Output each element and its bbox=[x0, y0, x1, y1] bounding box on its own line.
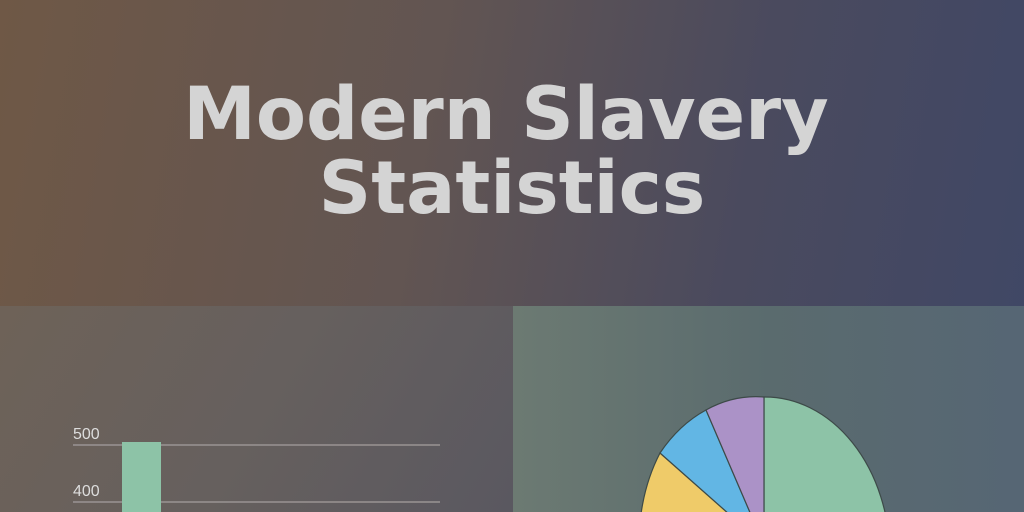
bar chart bbox=[73, 426, 440, 512]
title: Modern Slavery bbox=[183, 72, 829, 157]
panel: pie chart bbox=[513, 306, 1024, 512]
bar chart: 400 bbox=[73, 483, 100, 500]
bar chart: 500 bbox=[73, 426, 100, 443]
title: Statistics bbox=[319, 146, 705, 231]
panel: bar chart bbox=[0, 306, 513, 512]
pie chart bbox=[640, 396, 886, 512]
title bbox=[183, 72, 829, 231]
